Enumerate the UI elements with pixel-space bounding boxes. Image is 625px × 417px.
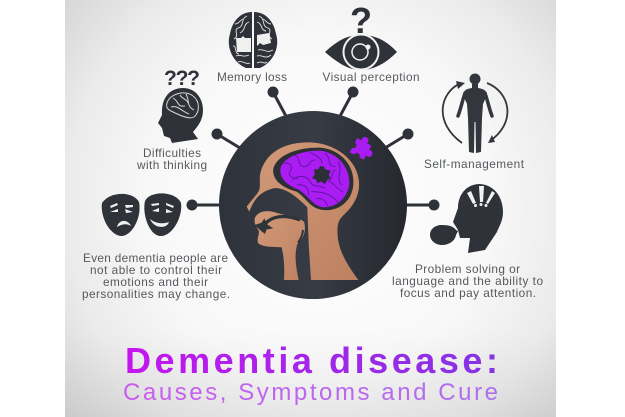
label: difficulties with thinking [136,146,207,172]
question marks: ??? [164,67,200,90]
text: emotions: emotions and their [103,275,208,289]
head profile [247,142,359,280]
label: difficulties with thinking: Difficulties [143,146,201,160]
text: problem solving: language and the ability to [392,274,543,288]
icon: memory loss brain [229,12,277,68]
label: memory loss: Memory loss [217,70,287,84]
label: self-management: Self-management [424,157,525,171]
connector spokes [188,88,438,209]
brain cavity [273,148,353,210]
label: difficulties with thinking: with thinking [136,158,207,172]
question mark: ? [350,0,372,41]
label: visual perception: Visual perception [322,70,420,84]
background panel [65,0,556,417]
text: problem solving [392,262,543,300]
subtitle: Causes, Symptoms and Cure [123,379,498,406]
text: emotions: not able to control their [90,263,222,277]
airway [265,217,300,224]
icon: self-management figure [443,74,507,153]
text: emotions [82,251,230,301]
icon: visual perception eye [325,0,397,70]
puzzle gaps [236,36,251,52]
icon: speaking head with exclamation marks [430,184,503,253]
purple puzzle piece [346,132,378,165]
text: emotions: personalities may change. [82,287,230,301]
text: problem solving: Problem solving or [415,262,520,276]
icon: thinking head [158,67,203,143]
text: problem solving: focus and pay attention. [400,286,536,300]
speech bubble [430,225,458,245]
icon: theatre masks [102,193,181,236]
title: Dementia disease: [125,340,498,381]
missing brain piece [312,166,331,184]
brain [280,151,349,207]
central circle with head illustration [219,111,407,299]
text: emotions: Even dementia people are [83,251,228,265]
